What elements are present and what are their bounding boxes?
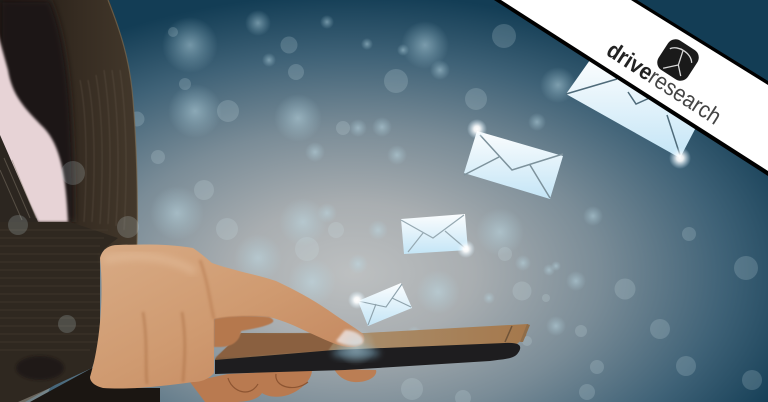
tablet xyxy=(215,324,530,374)
lower hand behind tablet xyxy=(190,369,376,402)
logo icon xyxy=(654,36,702,84)
logo wordmark: driveresearch xyxy=(602,36,726,130)
sleeve xyxy=(0,222,160,402)
jacket and shirt xyxy=(0,0,137,250)
banner xyxy=(494,0,768,176)
envelope: small xyxy=(348,283,412,326)
touch glow xyxy=(336,326,376,366)
bubbles over figure xyxy=(8,161,139,333)
envelope: middle xyxy=(401,214,475,258)
envelope: far top, partly under banner xyxy=(566,60,705,169)
envelope: large xyxy=(464,119,563,199)
soft bokeh glows xyxy=(150,10,603,343)
hand and pointing finger xyxy=(90,244,364,389)
